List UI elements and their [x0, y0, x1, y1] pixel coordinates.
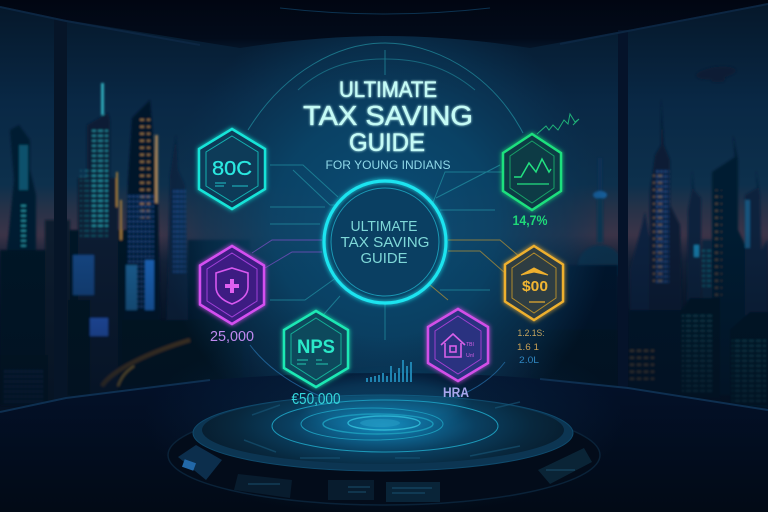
hexagon: health shield: [200, 246, 264, 324]
hexagon: gold savings: $00: [522, 279, 548, 295]
hexagon: HRA house: [428, 309, 488, 381]
label: savings figures: 2.0L: [519, 355, 539, 366]
central node text: TAX SAVING: [340, 234, 430, 251]
icon: shield with plus: [216, 268, 248, 304]
platform upward glow: [303, 378, 463, 426]
title: ULTIMATE: [339, 77, 437, 102]
title: GUIDE: [349, 129, 425, 157]
flying vehicle: [695, 64, 737, 82]
label: 14,7%: 14,7%: [512, 213, 548, 228]
hexagon: gold savings: [505, 246, 563, 320]
central node text: [340, 218, 430, 267]
platform screens: [178, 402, 592, 502]
holographic platform: [168, 395, 600, 505]
central node circle: [324, 181, 446, 303]
subtitle: FOR YOUNG INDIANS: [326, 160, 451, 172]
mini bar chart: [366, 360, 412, 382]
label: savings figures: [517, 328, 544, 366]
label: savings figures: 1.2.1S:: [518, 328, 544, 339]
hexagon: HRA house: TBI: [466, 342, 474, 348]
left city skyline: [0, 83, 250, 405]
label: savings figures: 1.6 1: [517, 342, 539, 353]
title: [303, 77, 473, 157]
lower city darkening: [0, 230, 768, 405]
icon: line chart: [514, 159, 551, 177]
hexagon: NPS: [284, 311, 348, 387]
hexagon: 80C: [199, 129, 265, 209]
left highway lights: [102, 340, 190, 386]
title: TAX SAVING: [303, 100, 473, 131]
hexagon: HRA house: Uлl: [466, 353, 474, 359]
central node text: GUIDE: [360, 250, 408, 267]
platform rings: [272, 400, 498, 452]
right city skyline: [530, 64, 768, 408]
hologram glow field: [155, 0, 615, 450]
platform rim: [193, 395, 573, 471]
floating sparkline: [537, 114, 579, 134]
platform base: [168, 405, 600, 505]
label: HRA: HRA: [443, 385, 469, 400]
hexagon: growth chart: [503, 134, 561, 210]
label: 25,000: 25,000: [210, 329, 254, 345]
platform disc: [202, 396, 564, 464]
hologram arcs and circuit lines: [248, 43, 523, 410]
icon: house: [441, 334, 465, 357]
central node text: ULTIMATE: [350, 218, 418, 235]
hexagon: NPS: NPS: [297, 337, 335, 358]
icon: roof: [521, 268, 548, 275]
label: €50,000: €50,000: [292, 391, 341, 408]
hexagon: 80C: 80C: [212, 158, 252, 180]
